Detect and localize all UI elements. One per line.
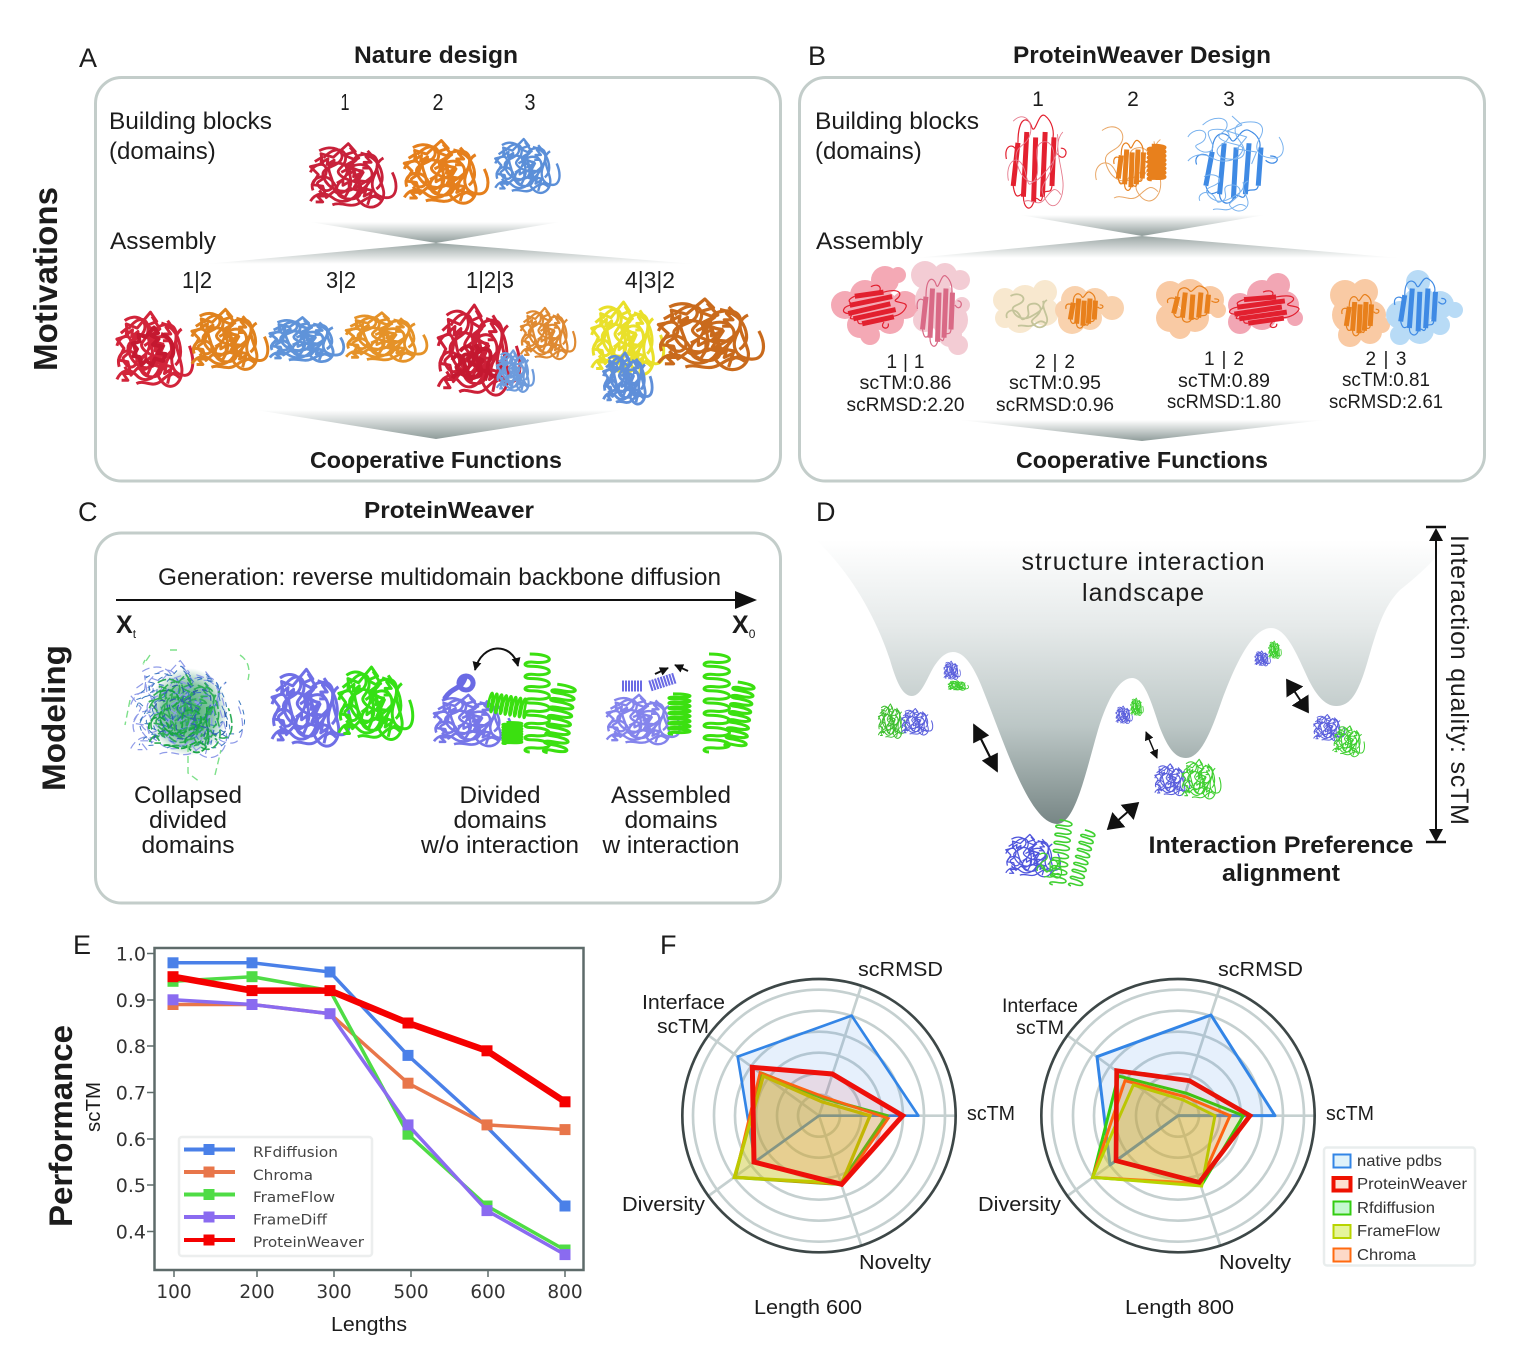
score labels: 1|2: scTM:0.89	[1178, 371, 1270, 392]
arrow: left exchange	[974, 725, 997, 771]
caption: collapsed divided domains: Collapsed	[134, 782, 242, 809]
funnel: assembly to functions	[960, 420, 1325, 441]
text: building blocks: Building blocks	[109, 108, 272, 135]
axis title: scTM: scTM	[83, 1082, 105, 1132]
radar chart: length 800	[978, 959, 1374, 1319]
score labels: 1|1: 1 | 1	[886, 352, 924, 373]
series: FrameDiff	[168, 995, 570, 1260]
mini protein: far right	[1314, 714, 1367, 758]
y axis ticks and labels: 1.0	[116, 944, 146, 966]
axis labels: scTM	[967, 1103, 1015, 1125]
domain numbers	[340, 89, 536, 115]
axis label: Interaction quality: scTM	[1445, 535, 1473, 825]
series: native pdbs	[1097, 1015, 1275, 1165]
text: interaction preference alignment: Interaction Preference	[1148, 832, 1414, 859]
score labels: 2|2: 2 | 2	[1035, 352, 1075, 373]
y axis ticks and labels: 0.7	[116, 1082, 146, 1104]
arrow: generation direction	[116, 591, 757, 609]
protein: assembled domains	[607, 654, 755, 752]
arrow: lower exchange	[1108, 803, 1138, 829]
arrow: domain rotation	[475, 648, 518, 670]
y axis ticks and labels: 0.8	[116, 1036, 146, 1058]
series: FrameFlow	[168, 972, 570, 1255]
axis title: Lengths: Lengths	[331, 1314, 407, 1336]
surface proteins: 1|2	[1156, 273, 1303, 339]
x axis ticks and labels: 600	[470, 1282, 506, 1303]
caption: divided domains without interaction: Divided	[460, 782, 540, 809]
text: building blocks: (domains)	[109, 138, 216, 165]
label: X0: X	[732, 611, 749, 639]
panel label: B: B	[808, 41, 826, 71]
legend	[179, 1137, 372, 1256]
series: Rfdiffusion	[1093, 1076, 1243, 1185]
axis: interaction quality	[1426, 527, 1446, 842]
series: Rfdiffusion	[735, 1073, 887, 1184]
text: cooperative functions: Cooperative Functions	[310, 447, 562, 473]
series: ProteinWeaver	[168, 972, 570, 1107]
domain numbers: 3	[524, 89, 536, 115]
assembly labels: 4|3|2	[625, 267, 675, 293]
surface proteins: 2|3	[1330, 270, 1463, 347]
domain numbers: 2	[1127, 88, 1139, 111]
protein: divided domains	[434, 654, 576, 755]
x axis ticks and labels: 100	[156, 1282, 192, 1303]
panel label: E: E	[73, 930, 91, 960]
axis labels: scRMSD	[858, 959, 943, 981]
radar legend: native pdbs	[1357, 1153, 1442, 1170]
panel: A nature design	[96, 78, 780, 481]
legend: FrameDiff	[253, 1212, 328, 1228]
domain numbers: 1	[1032, 88, 1044, 111]
text: building blocks: Building blocks	[815, 108, 979, 135]
assembled proteins	[117, 299, 763, 404]
series: Chroma	[735, 1073, 888, 1184]
protein domains row	[310, 139, 559, 207]
legend: FrameFlow	[253, 1190, 335, 1206]
caption: divided domains without interaction: w/o interaction	[420, 832, 579, 859]
series: Chroma	[168, 1000, 570, 1135]
mini protein: left shoulder	[878, 704, 933, 738]
domain numbers: 2	[432, 89, 444, 115]
row heading: Performance: Performance	[43, 1025, 79, 1227]
panel label: F: F	[660, 930, 676, 960]
axis labels: scTM	[1326, 1103, 1374, 1125]
mini protein: right peak	[1255, 641, 1281, 666]
axis labels: Interface	[642, 992, 725, 1014]
score labels: 2|2	[996, 352, 1114, 416]
y axis ticks and labels: 0.6	[116, 1129, 146, 1151]
x axis ticks and labels	[156, 1270, 583, 1303]
radar legend: Rfdiffusion	[1357, 1200, 1435, 1217]
chart caption: Length 800	[1125, 1297, 1234, 1319]
domain numbers: 3	[1223, 88, 1235, 111]
label: X0: 0	[749, 627, 756, 641]
panel: D interaction landscape	[816, 527, 1473, 889]
label: Xt: t	[133, 627, 137, 641]
arrow: right exchange	[1287, 680, 1308, 712]
series: Chroma	[1093, 1081, 1230, 1183]
x axis ticks and labels: 200	[239, 1282, 275, 1303]
panel C title: ProteinWeaver	[364, 497, 534, 523]
axis labels	[622, 959, 1015, 1274]
axis labels: Novelty	[1219, 1252, 1291, 1274]
panel: B proteinweaver design	[800, 78, 1484, 481]
text: assembly: Assembly	[110, 228, 216, 255]
score labels: 2|2: scTM:0.95	[1009, 373, 1101, 394]
axis labels	[978, 959, 1374, 1274]
arrow: center exchange	[1146, 732, 1157, 758]
radar grid	[1041, 979, 1315, 1252]
row heading: Motivations: Motivations	[27, 187, 64, 371]
radar legend: ProteinWeaver	[1357, 1176, 1468, 1193]
caption: assembled domains with interaction: w interaction	[601, 832, 740, 859]
series: RFdiffusion	[168, 958, 570, 1211]
mini protein: left peak	[944, 661, 968, 690]
score labels: 2|3: scTM:0.81	[1342, 370, 1430, 391]
score labels: 1|1: scRMSD:2.20	[846, 395, 964, 416]
domain numbers	[1032, 88, 1235, 111]
protein: compact blue and green	[272, 667, 413, 746]
score labels: 2|2: scRMSD:0.96	[996, 395, 1114, 416]
panel B title: ProteinWeaver Design	[1013, 42, 1271, 69]
panel A title: Nature design	[354, 42, 518, 69]
panel label: D: D	[816, 497, 836, 527]
chart caption: Length 600	[754, 1297, 862, 1319]
line chart: scTM by length	[83, 944, 584, 1336]
domain numbers: 1	[340, 89, 350, 115]
axis labels: Novelty	[859, 1252, 931, 1274]
axis labels: scTM	[657, 1016, 709, 1038]
radar legend: Chroma	[1357, 1247, 1416, 1264]
axis labels: Diversity	[978, 1194, 1061, 1216]
series: FrameFlow	[1093, 1085, 1215, 1186]
mini protein: right valley	[1155, 759, 1221, 799]
row heading: Modeling: Modeling	[36, 645, 72, 791]
score labels: 2|3	[1329, 349, 1443, 413]
legend: RFdiffusion	[253, 1145, 338, 1161]
score labels: 1|2: 1 | 2	[1204, 349, 1244, 370]
series: ProteinWeaver	[1116, 1071, 1250, 1182]
arrows: domains approaching	[655, 665, 688, 674]
caption: divided domains without interaction: domains	[454, 807, 546, 834]
caption: collapsed divided domains: domains	[142, 832, 234, 859]
axis labels: Interface	[1002, 996, 1078, 1017]
label: Xt: X	[116, 611, 133, 639]
score labels: 2|3: scRMSD:2.61	[1329, 392, 1443, 413]
assembly labels	[182, 267, 675, 293]
caption: assembled domains with interaction: domains	[624, 807, 718, 834]
text: interaction preference alignment: alignment	[1222, 860, 1340, 887]
y axis ticks and labels: 0.5	[116, 1175, 146, 1197]
funnel: blocks to assembly	[205, 222, 695, 264]
x axis ticks and labels: 300	[316, 1282, 352, 1303]
y axis ticks and labels	[116, 944, 154, 1244]
panel: C modeling	[96, 533, 780, 903]
radar legend: FrameFlow	[1357, 1223, 1440, 1240]
energy landscape surface	[816, 540, 1440, 824]
noise cloud structure	[125, 650, 249, 782]
mini protein: center peak	[1116, 698, 1143, 724]
radar legend	[1324, 1148, 1475, 1266]
assembly labels: 1|2	[182, 267, 212, 293]
series: native pdbs	[738, 1016, 918, 1162]
panel label: C: C	[78, 497, 98, 527]
radar grid	[682, 979, 956, 1252]
panel label: A: A	[79, 43, 97, 73]
x axis ticks and labels: 500	[393, 1282, 429, 1303]
surface proteins: 1|1	[831, 261, 970, 355]
text: assembly: Assembly	[816, 228, 923, 255]
text: building blocks: (domains)	[815, 138, 922, 165]
series: ProteinWeaver	[752, 1067, 903, 1184]
legend: ProteinWeaver	[253, 1235, 364, 1251]
caption: assembled domains with interaction: Assembled	[611, 782, 731, 809]
text: landscape caption: structure interaction	[1022, 548, 1264, 576]
x axis ticks and labels: 800	[547, 1282, 583, 1303]
score labels: 2|3: 2 | 3	[1366, 349, 1406, 370]
axis labels: scTM	[1016, 1018, 1064, 1039]
protein domains row	[1006, 115, 1283, 211]
score labels: 1|1: scTM:0.86	[860, 373, 952, 394]
radar chart: length 600	[622, 959, 1015, 1319]
assembly labels: 3|2	[326, 267, 356, 293]
mini protein: global minimum	[1006, 819, 1096, 889]
text: generation caption: Generation: reverse multidomain backbone diffusion	[158, 564, 721, 591]
surface proteins: 2|2	[993, 280, 1124, 334]
y axis ticks and labels: 0.9	[116, 990, 146, 1012]
assembly labels: 1|2|3	[466, 267, 514, 293]
axis labels: scRMSD	[1218, 959, 1303, 981]
caption: collapsed divided domains: divided	[149, 807, 227, 834]
funnel: assembly to functions	[256, 410, 622, 439]
axis labels: Diversity	[622, 1194, 705, 1216]
score labels: 1|2	[1167, 349, 1281, 413]
score labels: 1|1	[846, 352, 964, 416]
series: FrameFlow	[734, 1076, 870, 1183]
text: cooperative functions: Cooperative Functions	[1016, 447, 1268, 473]
y axis ticks and labels: 0.4	[116, 1222, 146, 1244]
legend: Chroma	[253, 1168, 313, 1184]
score labels: 1|2: scRMSD:1.80	[1167, 392, 1281, 413]
text: landscape caption: landscape	[1082, 579, 1204, 607]
funnel: blocks to assembly	[915, 215, 1400, 258]
